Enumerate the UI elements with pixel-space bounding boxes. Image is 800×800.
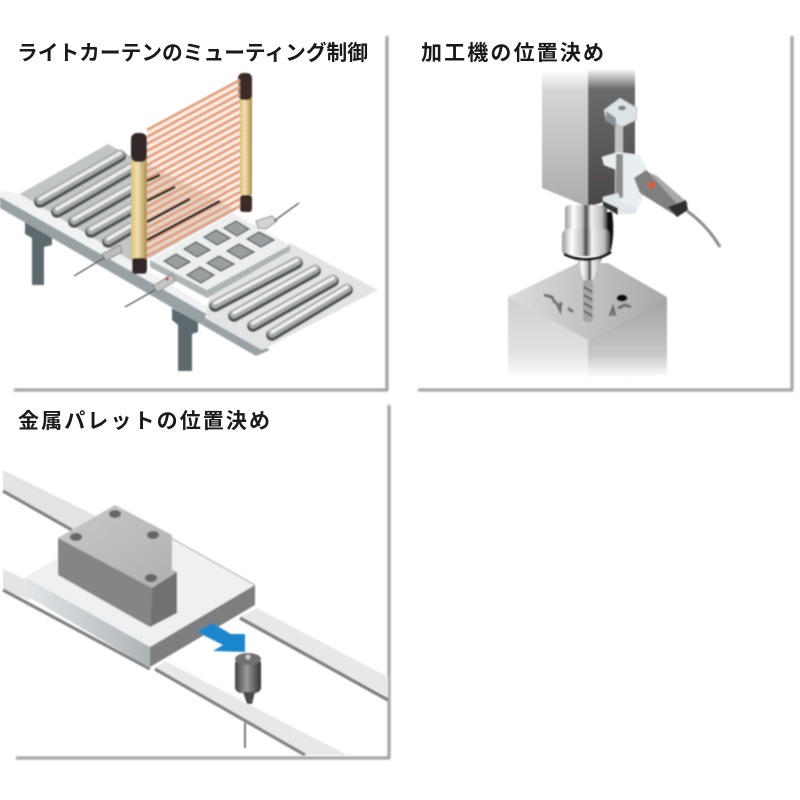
rails bbox=[3, 470, 388, 755]
panel frame shadow bbox=[16, 405, 389, 758]
pallet side bbox=[150, 245, 290, 298]
illustration: conveyor with light curtain bbox=[0, 73, 378, 371]
panel frame shadow bbox=[14, 36, 387, 390]
conveyor side frame bbox=[0, 196, 270, 356]
heading: metal pallet: 金属パレットの位置決め bbox=[18, 410, 270, 433]
mounting bracket bbox=[602, 98, 648, 215]
sensor cable bbox=[687, 211, 720, 247]
rear sensor bbox=[206, 188, 224, 196]
illustration: pallet on rails bbox=[3, 470, 388, 755]
workpiece block bbox=[58, 505, 177, 627]
curtain haze bbox=[147, 80, 240, 257]
illustration: spindle, sensor and workpiece bbox=[508, 70, 720, 378]
front light curtain post bbox=[131, 133, 147, 274]
rollers left bbox=[40, 153, 131, 242]
pallet top bbox=[150, 213, 290, 290]
rear light curtain post bbox=[238, 73, 252, 212]
light beams bbox=[147, 80, 240, 256]
proximity sensor with red indicator bbox=[634, 170, 688, 217]
positioning sensor bbox=[235, 653, 261, 748]
pallet plate bbox=[25, 515, 255, 668]
panel: light curtain muting control bbox=[0, 36, 387, 390]
chuck and drill bit bbox=[562, 205, 613, 322]
pallet workpieces bbox=[164, 221, 274, 283]
panel frame shadow bbox=[418, 36, 792, 390]
left conveyor bed bbox=[18, 144, 134, 265]
panel: machine tool positioning bbox=[418, 36, 792, 390]
dark shadow strips between beams bbox=[147, 175, 220, 240]
heading: light curtain: ライトカーテンのミューティング制御 bbox=[17, 41, 368, 65]
rollers right bbox=[215, 260, 347, 335]
right conveyor bed bbox=[205, 243, 378, 350]
workpiece block bbox=[508, 263, 667, 378]
photoelectric sensors bbox=[74, 203, 299, 307]
conveyor seen through the curtain bbox=[147, 163, 236, 258]
conveyor legs bbox=[25, 222, 198, 371]
movement arrow bbox=[197, 623, 245, 652]
spindle column bbox=[542, 70, 635, 207]
panel: metal pallet positioning bbox=[3, 405, 389, 758]
heading: machine tool: 加工機の位置決め bbox=[421, 42, 604, 65]
